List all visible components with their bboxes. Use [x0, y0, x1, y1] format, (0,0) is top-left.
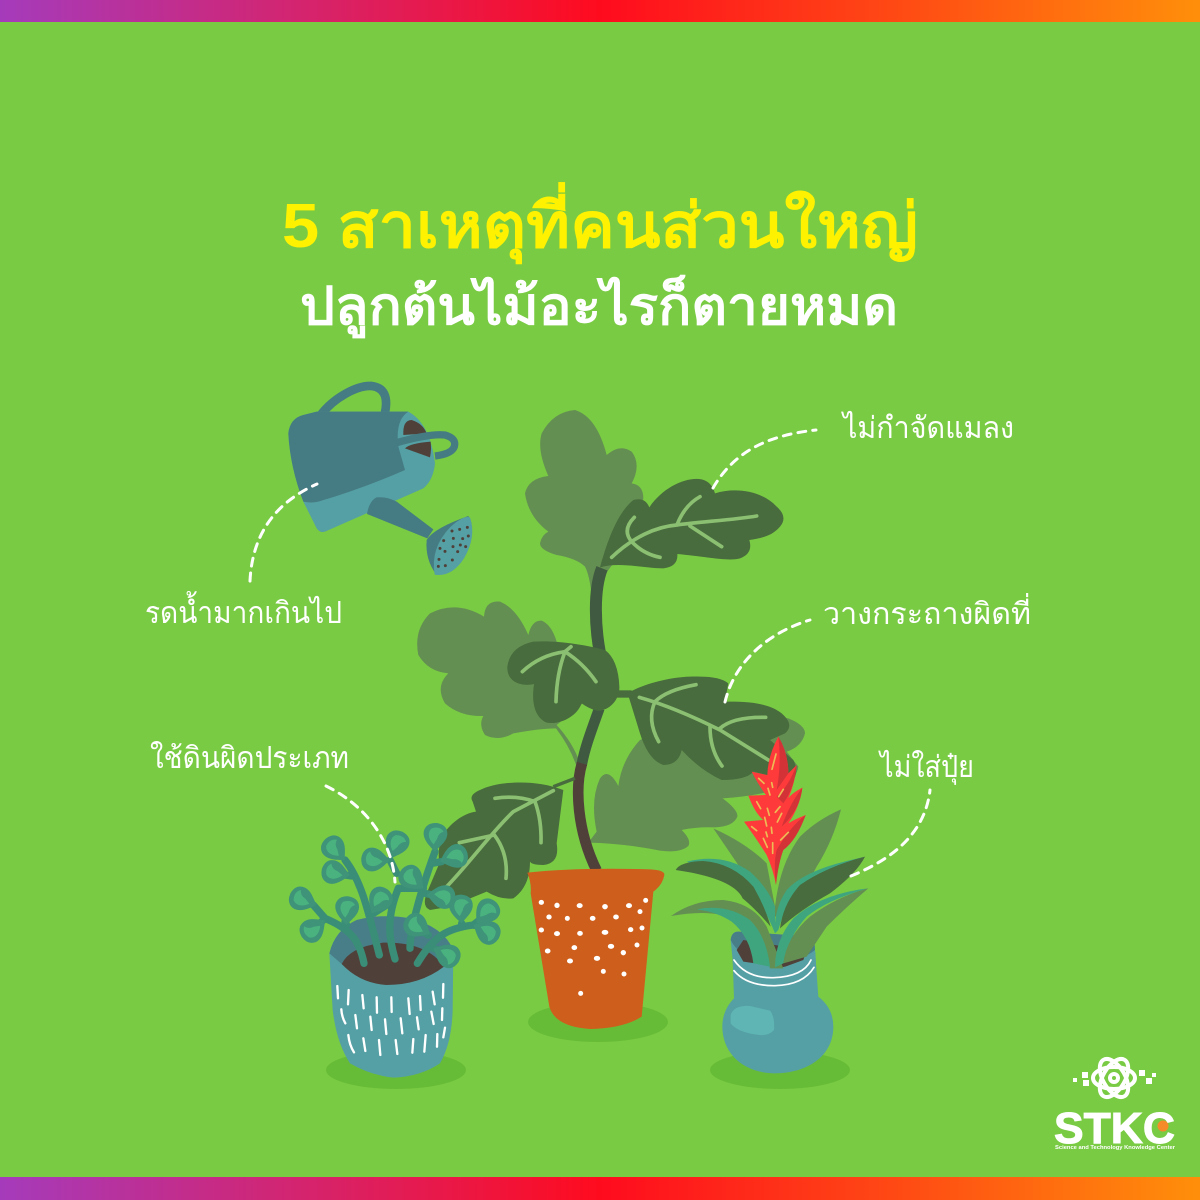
- pot body: [527, 869, 664, 1029]
- pot inner wall: [329, 916, 453, 967]
- spout: [367, 497, 433, 538]
- vase inner: [731, 932, 815, 962]
- top handle: [321, 386, 386, 415]
- back leaves: [417, 410, 805, 851]
- logo tagline: Science and Technology Knowledge Center: [1055, 1145, 1176, 1151]
- title: 5 สาเหตุที่คนส่วนใหญ่: [282, 182, 918, 264]
- logo wordmark: STKC: [1054, 1104, 1175, 1153]
- bottom gradient bar: [0, 1177, 1200, 1200]
- can body: [288, 412, 435, 532]
- sprinkler face: [434, 517, 472, 575]
- cause labels: [145, 410, 1031, 786]
- ground shadows: [326, 1002, 850, 1089]
- big plant: [417, 410, 805, 910]
- right plant in vase: [671, 737, 868, 1073]
- dashed connector lines: [250, 430, 930, 882]
- vase white rings: [734, 960, 814, 986]
- sprout leaves: [286, 823, 505, 972]
- title: ปลูกต้นไม้อะไรก็ตายหมด: [300, 275, 898, 339]
- cause labels: ไม่กำจัดแมลง: [841, 410, 1014, 445]
- stem: [553, 568, 632, 871]
- pot body: [329, 916, 453, 1078]
- cause labels: วางกระถางผิดที่: [823, 593, 1031, 631]
- left plant in blue pot: [286, 823, 505, 1078]
- pot dots: [539, 898, 648, 996]
- logo atom: [1093, 1054, 1135, 1102]
- soil: [342, 943, 444, 985]
- top gradient bar: [0, 0, 1200, 22]
- can opening: [403, 420, 431, 457]
- front handle: [397, 435, 455, 456]
- foliage: [671, 809, 868, 968]
- STKC logo: [1054, 1054, 1176, 1153]
- leaf veins: [445, 497, 768, 888]
- can shaded side: [288, 412, 408, 502]
- sprout stems: [313, 852, 482, 963]
- logo dot: [1158, 1120, 1168, 1132]
- vase body: [722, 932, 833, 1073]
- dark leaves: [425, 479, 796, 910]
- watering can: [288, 386, 472, 575]
- sprinkler holes: [437, 526, 470, 568]
- vase rim fill: [733, 952, 817, 977]
- terracotta pot: [527, 869, 664, 1029]
- cause labels: ใช้ดินผิดประเภท: [150, 741, 349, 775]
- soil: [737, 940, 807, 967]
- title: [282, 182, 918, 339]
- sprinkler head: [426, 516, 472, 575]
- red flower: [744, 737, 806, 885]
- logo pixel squares: [1073, 1070, 1156, 1086]
- pot dashes: [337, 984, 445, 1055]
- vase highlight: [731, 1006, 774, 1035]
- cause labels: ไม่ใส่ปุ๋ย: [878, 749, 974, 786]
- cause labels: รดน้ำมากเกินไป: [145, 591, 342, 630]
